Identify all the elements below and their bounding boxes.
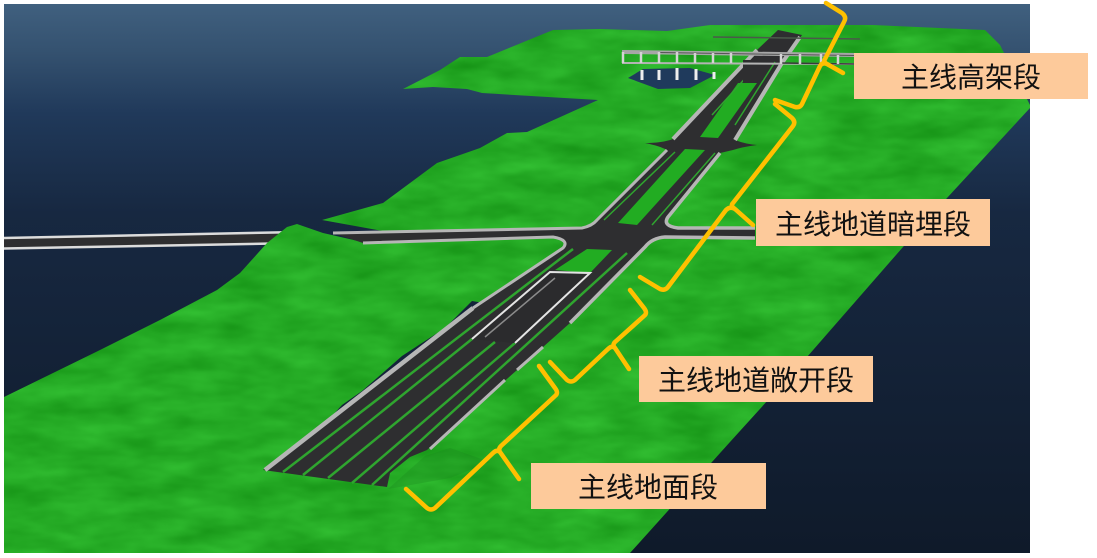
bracket: open-cut underpass section — [550, 290, 646, 382]
road network — [263, 30, 802, 487]
green medians — [555, 83, 757, 273]
label: ground section: 主线地面段 — [578, 472, 718, 503]
road curbs — [265, 37, 800, 470]
dark block under the viaduct — [743, 60, 767, 82]
bracket: elevated section — [775, 3, 845, 107]
road: west approach over water — [4, 232, 300, 249]
label: open-cut underpass section: 主线地道敞开段 — [658, 365, 854, 396]
viaduct structure — [622, 37, 860, 80]
bracket: ground section — [406, 366, 557, 510]
lane stripes — [283, 62, 775, 485]
bracket: covered underpass section — [640, 104, 794, 290]
label: open-cut underpass section — [639, 356, 873, 402]
label: covered underpass section: 主线地道暗埋段 — [775, 209, 971, 240]
label: ground section — [531, 463, 766, 509]
terrain shading beside the road — [388, 448, 490, 489]
label: covered underpass section — [756, 199, 990, 246]
lake under the viaduct — [628, 68, 715, 89]
label: elevated section: 主线高架段 — [901, 62, 1041, 93]
label: elevated section — [854, 53, 1088, 99]
dark shadow along the cut slope — [328, 301, 484, 425]
depressed section: open trench — [472, 272, 590, 343]
